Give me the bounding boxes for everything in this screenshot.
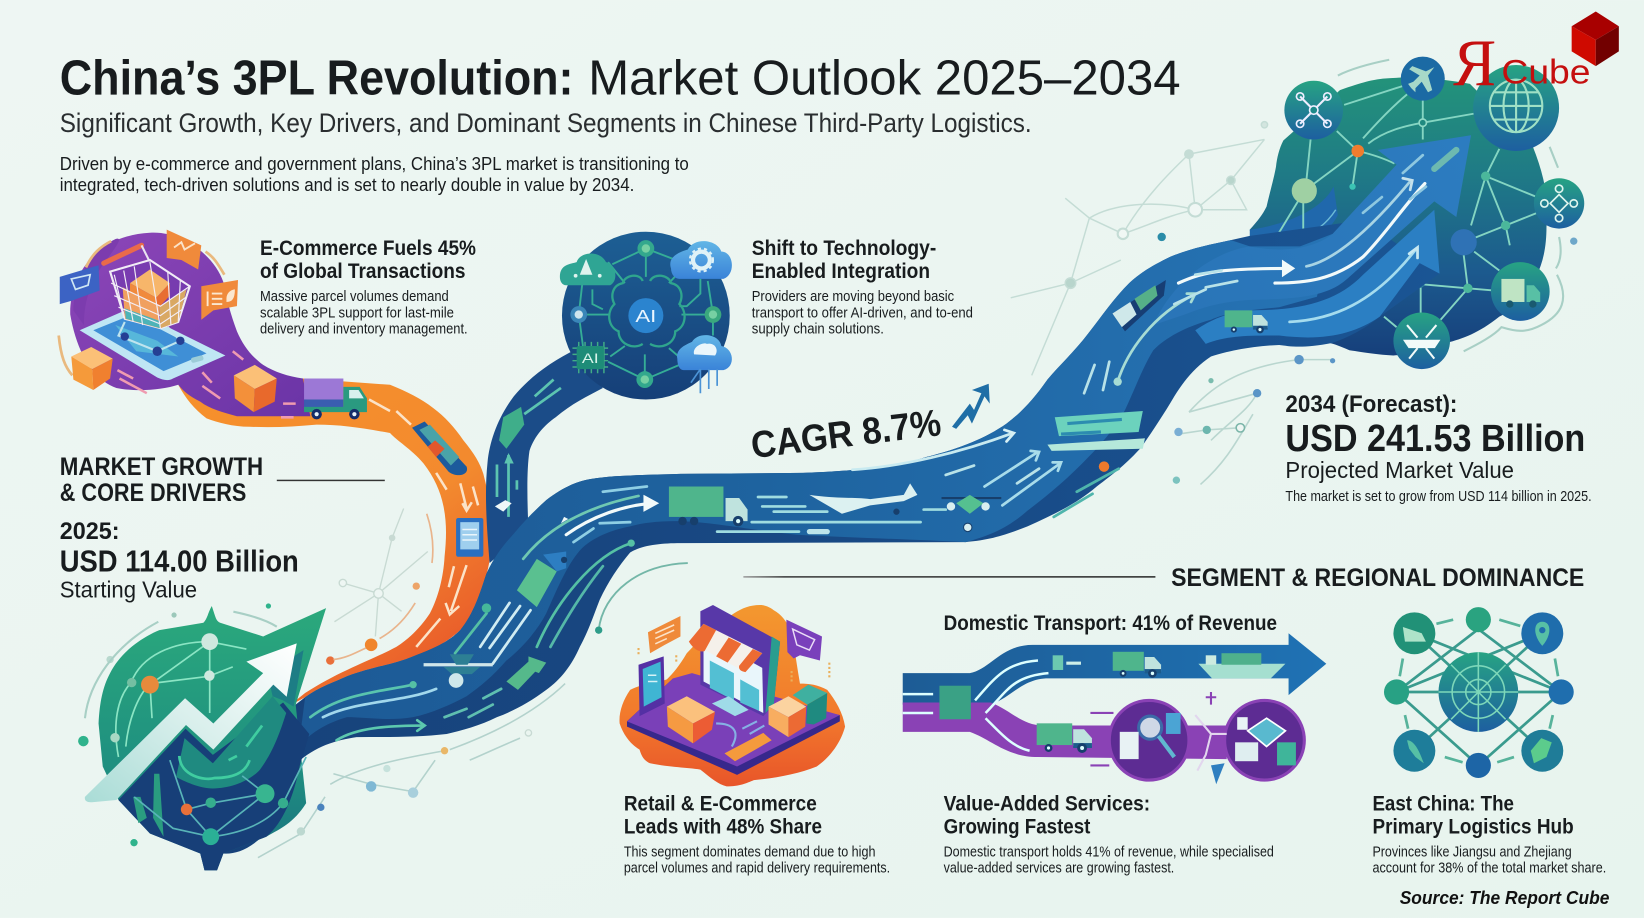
decoration dot <box>1158 233 1166 241</box>
basket cells <box>123 287 187 328</box>
AI stem <box>486 349 603 563</box>
text block: retail: Leads with 48% Share <box>624 816 822 839</box>
text block: retail <box>624 792 890 876</box>
text block: e-commerce: delivery and inventory management. <box>260 321 468 337</box>
ship <box>1112 280 1166 331</box>
cargo on road <box>1047 411 1145 451</box>
stat: 2034: USD 241.53 Billion <box>1285 417 1585 459</box>
region nodes <box>1384 607 1574 778</box>
icon: shopping cart <box>104 245 190 356</box>
heading: segment and regional dominance: SEGMENT & REGIONAL DOMINANCE <box>1171 565 1584 592</box>
text block: retail: This segment dominates demand due to high <box>624 845 875 861</box>
text block: technology: Enabled Integration <box>752 260 930 283</box>
stat: 2025: 2025: <box>60 518 120 544</box>
platform <box>627 678 840 775</box>
left blob: start growth <box>78 603 326 870</box>
ship <box>1198 664 1285 678</box>
stat: 2034: The market is set to grow from USD 114 billion in 2025. <box>1285 489 1592 505</box>
logo cube <box>1572 12 1619 66</box>
purple blob: e-commerce <box>59 230 310 417</box>
monitor <box>700 605 780 716</box>
ship and document on orange road <box>369 399 483 647</box>
text block: east china: Provinces like Jiangsu and Zhejiang <box>1372 845 1572 861</box>
drone <box>942 495 1001 532</box>
road drone <box>424 654 493 688</box>
text block: technology: Providers are moving beyond basic <box>752 289 954 305</box>
logo wordmark <box>1453 25 1591 100</box>
logo wordmark: Cube <box>1501 53 1591 91</box>
icon: drone <box>1393 312 1450 369</box>
icon: chat bubbles <box>60 265 100 304</box>
intro paragraph: integrated, tech-driven solutions and is set to nearly double in value by 2034. <box>60 174 634 195</box>
cart bubble <box>786 620 822 661</box>
icon: plane <box>1401 57 1445 101</box>
text block: technology: supply chain solutions. <box>752 321 884 337</box>
icon: hub <box>1534 178 1584 229</box>
circular icons on right network <box>1284 57 1584 369</box>
text block: value-added services: value-added services are growing fastest. <box>944 860 1174 876</box>
icon: AI chip: AI <box>582 351 599 366</box>
phone <box>639 656 665 716</box>
heading: market growth: & CORE DRIVERS <box>60 480 246 507</box>
stat: 2034: 2034 (Forecast): <box>1285 391 1457 417</box>
orange blob <box>619 605 845 786</box>
parcel in cart <box>130 269 170 298</box>
icon: network node <box>1284 81 1343 139</box>
stat: 2025 <box>60 518 299 603</box>
vehicles on main road <box>424 280 1268 690</box>
text block: e-commerce: of Global Transactions <box>260 260 466 283</box>
upper road lane <box>299 234 1333 747</box>
icon: parcel boxes <box>71 347 277 412</box>
icon: AI chip <box>572 342 608 373</box>
stat: 2034: Projected Market Value <box>1285 457 1514 483</box>
road truck <box>517 552 567 607</box>
icon: zigzag up arrow <box>952 384 990 429</box>
boxes <box>667 685 827 761</box>
stat: 2025: Starting Value <box>60 577 197 603</box>
CAGR label: CAGR 8.7% <box>749 401 943 466</box>
thin network decoration: top right <box>1011 122 1268 375</box>
icon: truck circle <box>1491 262 1550 321</box>
orange ribbon <box>178 379 492 705</box>
subtitle: Significant Growth, Key Drivers, and Dominant Segments in Chinese Third-Party Logistics. <box>60 108 1032 138</box>
text block: retail: parcel volumes and rapid delivery requirements. <box>624 860 890 876</box>
second arrowhead <box>1195 210 1440 344</box>
text block: technology <box>752 237 973 337</box>
dark lower half <box>118 702 309 870</box>
icon: isometric store <box>619 605 845 786</box>
heading: market growth: MARKET GROWTH <box>60 454 263 481</box>
icon: upload cloud <box>677 335 732 370</box>
chat bubble <box>648 616 680 653</box>
title: China’s 3PL Revolution: <box>60 51 574 105</box>
intro paragraph <box>60 153 689 195</box>
diagram: split arrow <box>903 633 1326 784</box>
text block: retail: Retail & E-Commerce <box>624 792 817 815</box>
dark teal arrow shadow <box>267 650 304 707</box>
icon: white growth arrow <box>85 643 297 802</box>
truck on orange road <box>304 379 367 419</box>
text block: value-added services: Growing Fastest <box>944 816 1090 839</box>
AI panel <box>560 232 732 399</box>
source: Source: The Report Cube <box>1400 887 1609 908</box>
thin network decoration: left and lower <box>258 509 565 858</box>
blue arrow <box>903 633 1326 705</box>
text block: e-commerce: E-Commerce Fuels 45% <box>260 237 476 260</box>
text block: e-commerce <box>260 237 476 337</box>
text block: technology: transport to offer AI-driven, and to-end <box>752 306 973 322</box>
logo wordmark: Я <box>1453 25 1496 100</box>
icon: left cloud <box>560 253 615 285</box>
decorative arcs <box>59 241 224 375</box>
right blob: network <box>1250 78 1547 355</box>
title: Market Outlook 2025–2034 <box>588 51 1181 105</box>
title <box>60 51 1181 105</box>
icon: globe <box>1473 65 1559 151</box>
dots on lower left decoration <box>297 514 688 836</box>
parcel on road <box>506 656 546 690</box>
text block: value-added services <box>944 792 1274 876</box>
text block: technology: Shift to Technology- <box>752 237 936 260</box>
main blue ribbon <box>204 135 1471 870</box>
awning <box>689 624 762 672</box>
icon: gear cloud <box>670 241 732 279</box>
intro paragraph: Driven by e-commerce and government plans, China’s 3PL market is transitioning to <box>60 153 689 174</box>
stat: 2025: USD 114.00 Billion <box>60 544 299 578</box>
logo <box>1453 12 1619 100</box>
heading: domestic transport: Domestic Transport: 41% of Revenue <box>944 611 1277 635</box>
small icons inside <box>1139 716 1162 739</box>
text block: east china: account for 38% of the total market share. <box>1372 860 1606 876</box>
AI panel: AI <box>635 306 656 326</box>
diagram: hub and spoke network <box>1384 607 1574 778</box>
text block: e-commerce: scalable 3PL support for last-mile <box>260 306 454 322</box>
text block: east china: East China: The <box>1372 792 1514 815</box>
truck <box>669 487 748 526</box>
right decorative nodes below ribbon <box>1173 355 1335 484</box>
heading: market growth <box>60 454 385 507</box>
purple branch <box>903 702 1227 759</box>
floating dots and arcs <box>78 603 277 846</box>
text block: east china <box>1372 792 1606 876</box>
text block: value-added services: Domestic transport holds 41% of revenue, while specialised <box>944 845 1274 861</box>
text block: east china: Primary Logistics Hub <box>1372 816 1574 839</box>
text block: e-commerce: Massive parcel volumes demand <box>260 289 449 305</box>
stat: 2034 <box>1285 391 1592 505</box>
teal lozenge under arrow <box>176 696 286 788</box>
plane <box>809 483 917 514</box>
large arrowhead <box>1153 135 1471 325</box>
road markings <box>291 150 1456 778</box>
text block: value-added services: Value-Added Services: <box>944 792 1150 815</box>
icon: phone platform <box>80 308 225 380</box>
